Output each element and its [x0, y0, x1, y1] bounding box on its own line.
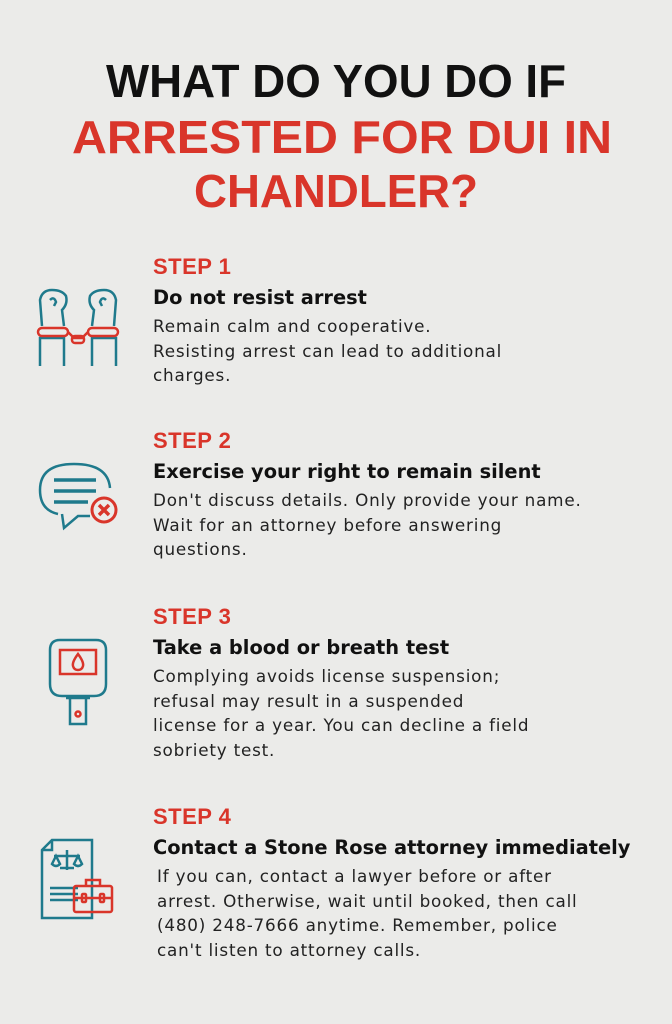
step 2 — [153, 428, 582, 559]
title: ARRESTED FOR DUI IN — [72, 111, 612, 163]
step 4: can't listen to attorney calls. — [157, 940, 421, 960]
step 4: If you can, contact a lawyer before or after — [157, 866, 552, 886]
step 4: Contact a Stone Rose attorney immediately — [153, 836, 630, 859]
step 1: Resisting arrest can lead to additional — [153, 340, 502, 360]
step 1 — [153, 254, 502, 385]
title: WHAT DO YOU DO IF — [106, 55, 566, 107]
step 2: questions. — [153, 539, 248, 559]
step 1: Remain calm and cooperative. — [153, 316, 431, 336]
step 2: STEP 2 — [153, 428, 231, 453]
icon: handcuffed fists — [36, 288, 120, 366]
step 2: Don't discuss details. Only provide your name. — [153, 490, 582, 510]
step 2: Wait for an attorney before answering — [153, 514, 502, 534]
step 4: arrest. Otherwise, wait until booked, then call — [157, 890, 578, 910]
step 3: Complying avoids license suspension; — [153, 666, 500, 686]
step 3: refusal may result in a suspended — [153, 690, 464, 710]
step 1: charges. — [153, 365, 231, 385]
step 1: Do not resist arrest — [153, 286, 367, 309]
step 3: Take a blood or breath test — [153, 636, 449, 659]
step 1: STEP 1 — [153, 254, 231, 279]
step 4: (480) 248-7666 anytime. Remember, police — [157, 915, 558, 935]
icon: legal document with briefcase — [40, 838, 114, 920]
title: CHANDLER? — [194, 165, 478, 217]
title — [72, 55, 612, 217]
step 2: Exercise your right to remain silent — [153, 460, 541, 483]
icon: breathalyzer — [48, 638, 108, 726]
step 3: license for a year. You can decline a field — [153, 715, 529, 735]
step 3 — [153, 604, 529, 760]
step 3: sobriety test. — [153, 740, 275, 760]
icon: speech bubble with x — [38, 462, 118, 530]
step 3: STEP 3 — [153, 604, 231, 629]
step 4 — [153, 804, 630, 960]
step 4: STEP 4 — [153, 804, 231, 829]
